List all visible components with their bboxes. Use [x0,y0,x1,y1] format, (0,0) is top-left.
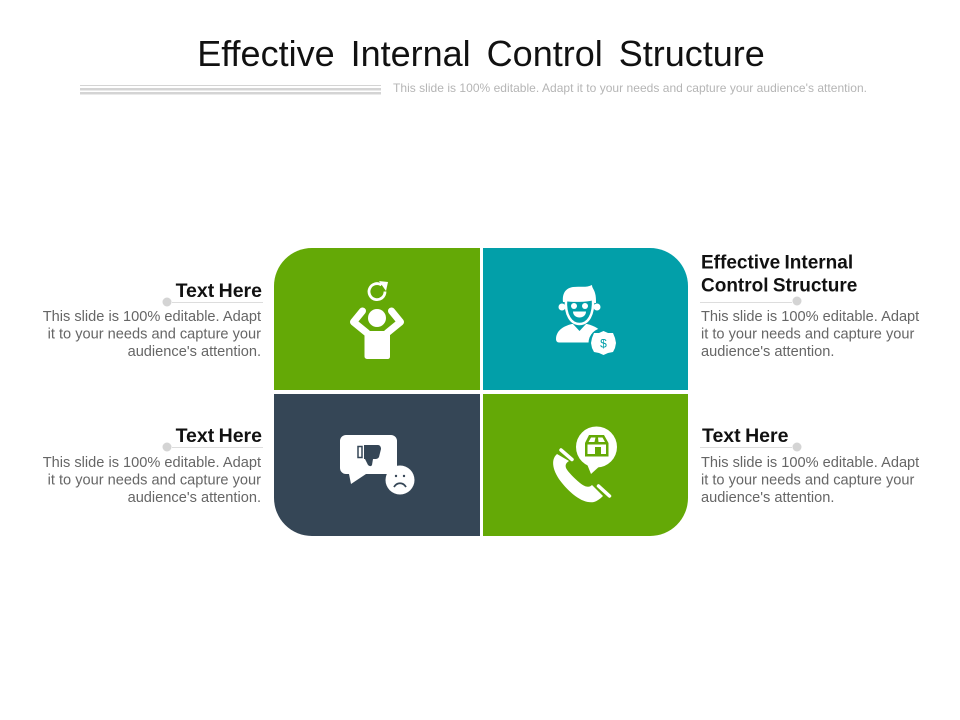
icon: telephone with shop speech bubble [553,426,617,502]
label: top left: This slide is 100% editable. Adapt [43,309,261,325]
panel: bottom left [274,394,480,536]
label: bottom right [700,425,919,506]
label: top left: Text Here [176,280,262,302]
panel: top left [274,248,480,390]
label: top left [43,280,263,360]
label: bottom right: This slide is 100% editable. Adapt [701,455,919,471]
label: top right: it to your needs and capture your [701,326,915,342]
subtitle: This slide is 100% editable. Adapt it to your needs and capture your audience's attention. [393,81,867,95]
label: top right: audience's attention. [701,344,834,360]
label: bottom left: Text Here [176,425,262,447]
label: top left: it to your needs and capture your [48,326,261,342]
panel: top right [483,248,688,390]
title rule lines [80,85,381,94]
label: top left: audience's attention. [128,344,261,360]
icon: smiling man with dollar badge: $ [600,336,607,350]
label: bottom left [43,425,263,506]
label: bottom right: Text Here [702,425,789,447]
panel: bottom right [483,394,688,536]
label: top right: This slide is 100% editable. Adapt [701,309,919,325]
icon: person with refresh arrow [354,281,400,359]
label: bottom left: This slide is 100% editable. Adapt [43,455,261,471]
label: bottom left: audience's attention. [128,490,261,506]
label: bottom left: it to your needs and capture your [48,472,261,488]
label: bottom right: it to your needs and capture your [701,472,915,488]
label: top right: Control Structure [701,276,857,296]
label: top right [700,252,919,360]
label: bottom right: audience's attention. [701,490,834,506]
icon: speech bubble thumbs down with sad face [340,435,414,494]
title: Effective Internal Control Structure [197,33,765,74]
label: top right: Effective Internal [701,252,853,274]
icon: smiling man with dollar badge [556,285,618,358]
